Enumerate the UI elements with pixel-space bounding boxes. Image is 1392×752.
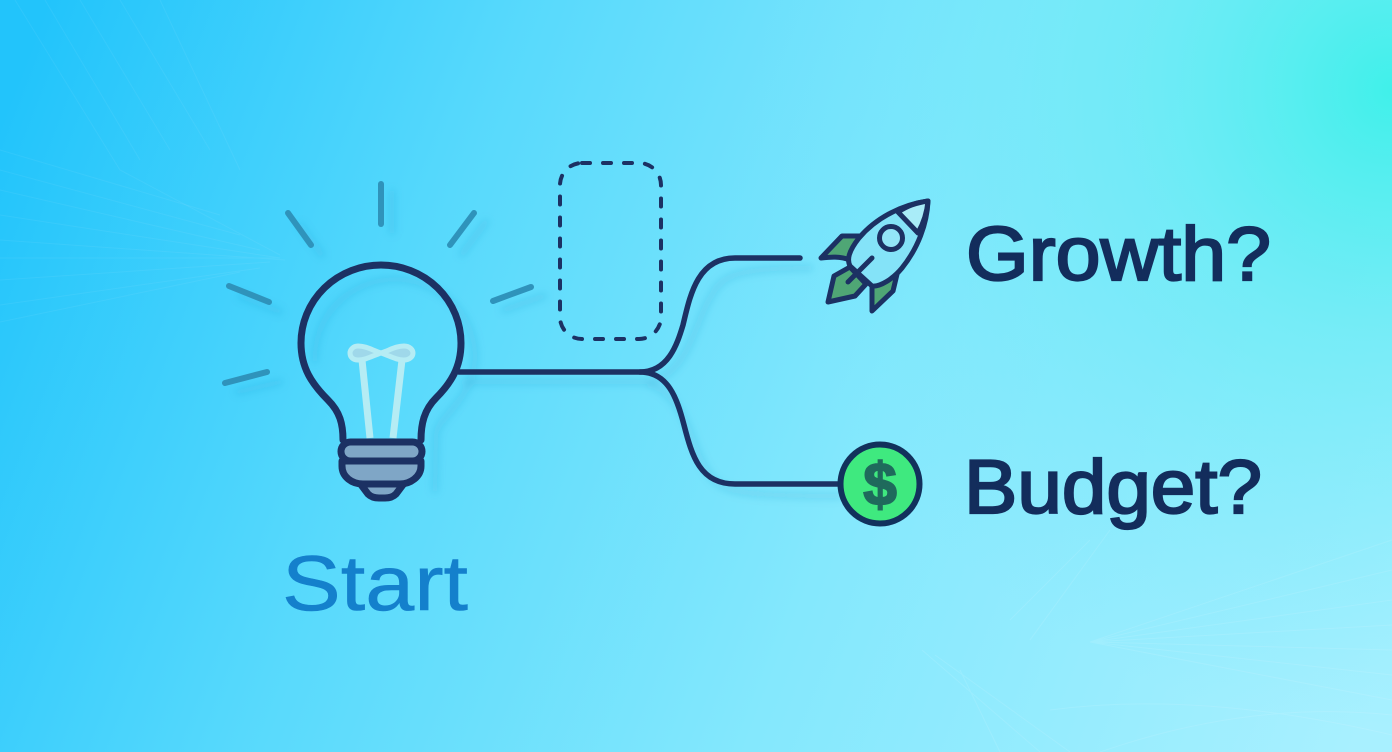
- dashed placeholder box: [560, 163, 661, 339]
- rocket fins: [821, 236, 898, 311]
- soft shadows of connectors and bulb: [238, 192, 840, 496]
- rocket exhaust: [848, 258, 872, 282]
- rocket nose: [898, 201, 928, 233]
- label: Start: Start: [282, 539, 468, 627]
- connector: branching line: [459, 258, 840, 484]
- label: Growth?: Growth?: [966, 212, 1271, 297]
- rocket body: [849, 201, 928, 286]
- icon: dollar coin: $: [863, 451, 897, 518]
- rocket window: [880, 226, 902, 250]
- label: Budget?: Budget?: [964, 445, 1262, 530]
- decorative lines: bottom right: [922, 530, 1392, 752]
- icon: dollar coin: [840, 444, 920, 524]
- bulb glass outline: [301, 265, 461, 440]
- bulb screw base: [341, 442, 422, 498]
- icon: light bulb: [301, 265, 461, 498]
- decorative lines: top left: [0, 0, 285, 322]
- icon: light rays: [225, 184, 531, 383]
- bulb filament: [350, 346, 413, 438]
- icon: rocket: [821, 201, 928, 311]
